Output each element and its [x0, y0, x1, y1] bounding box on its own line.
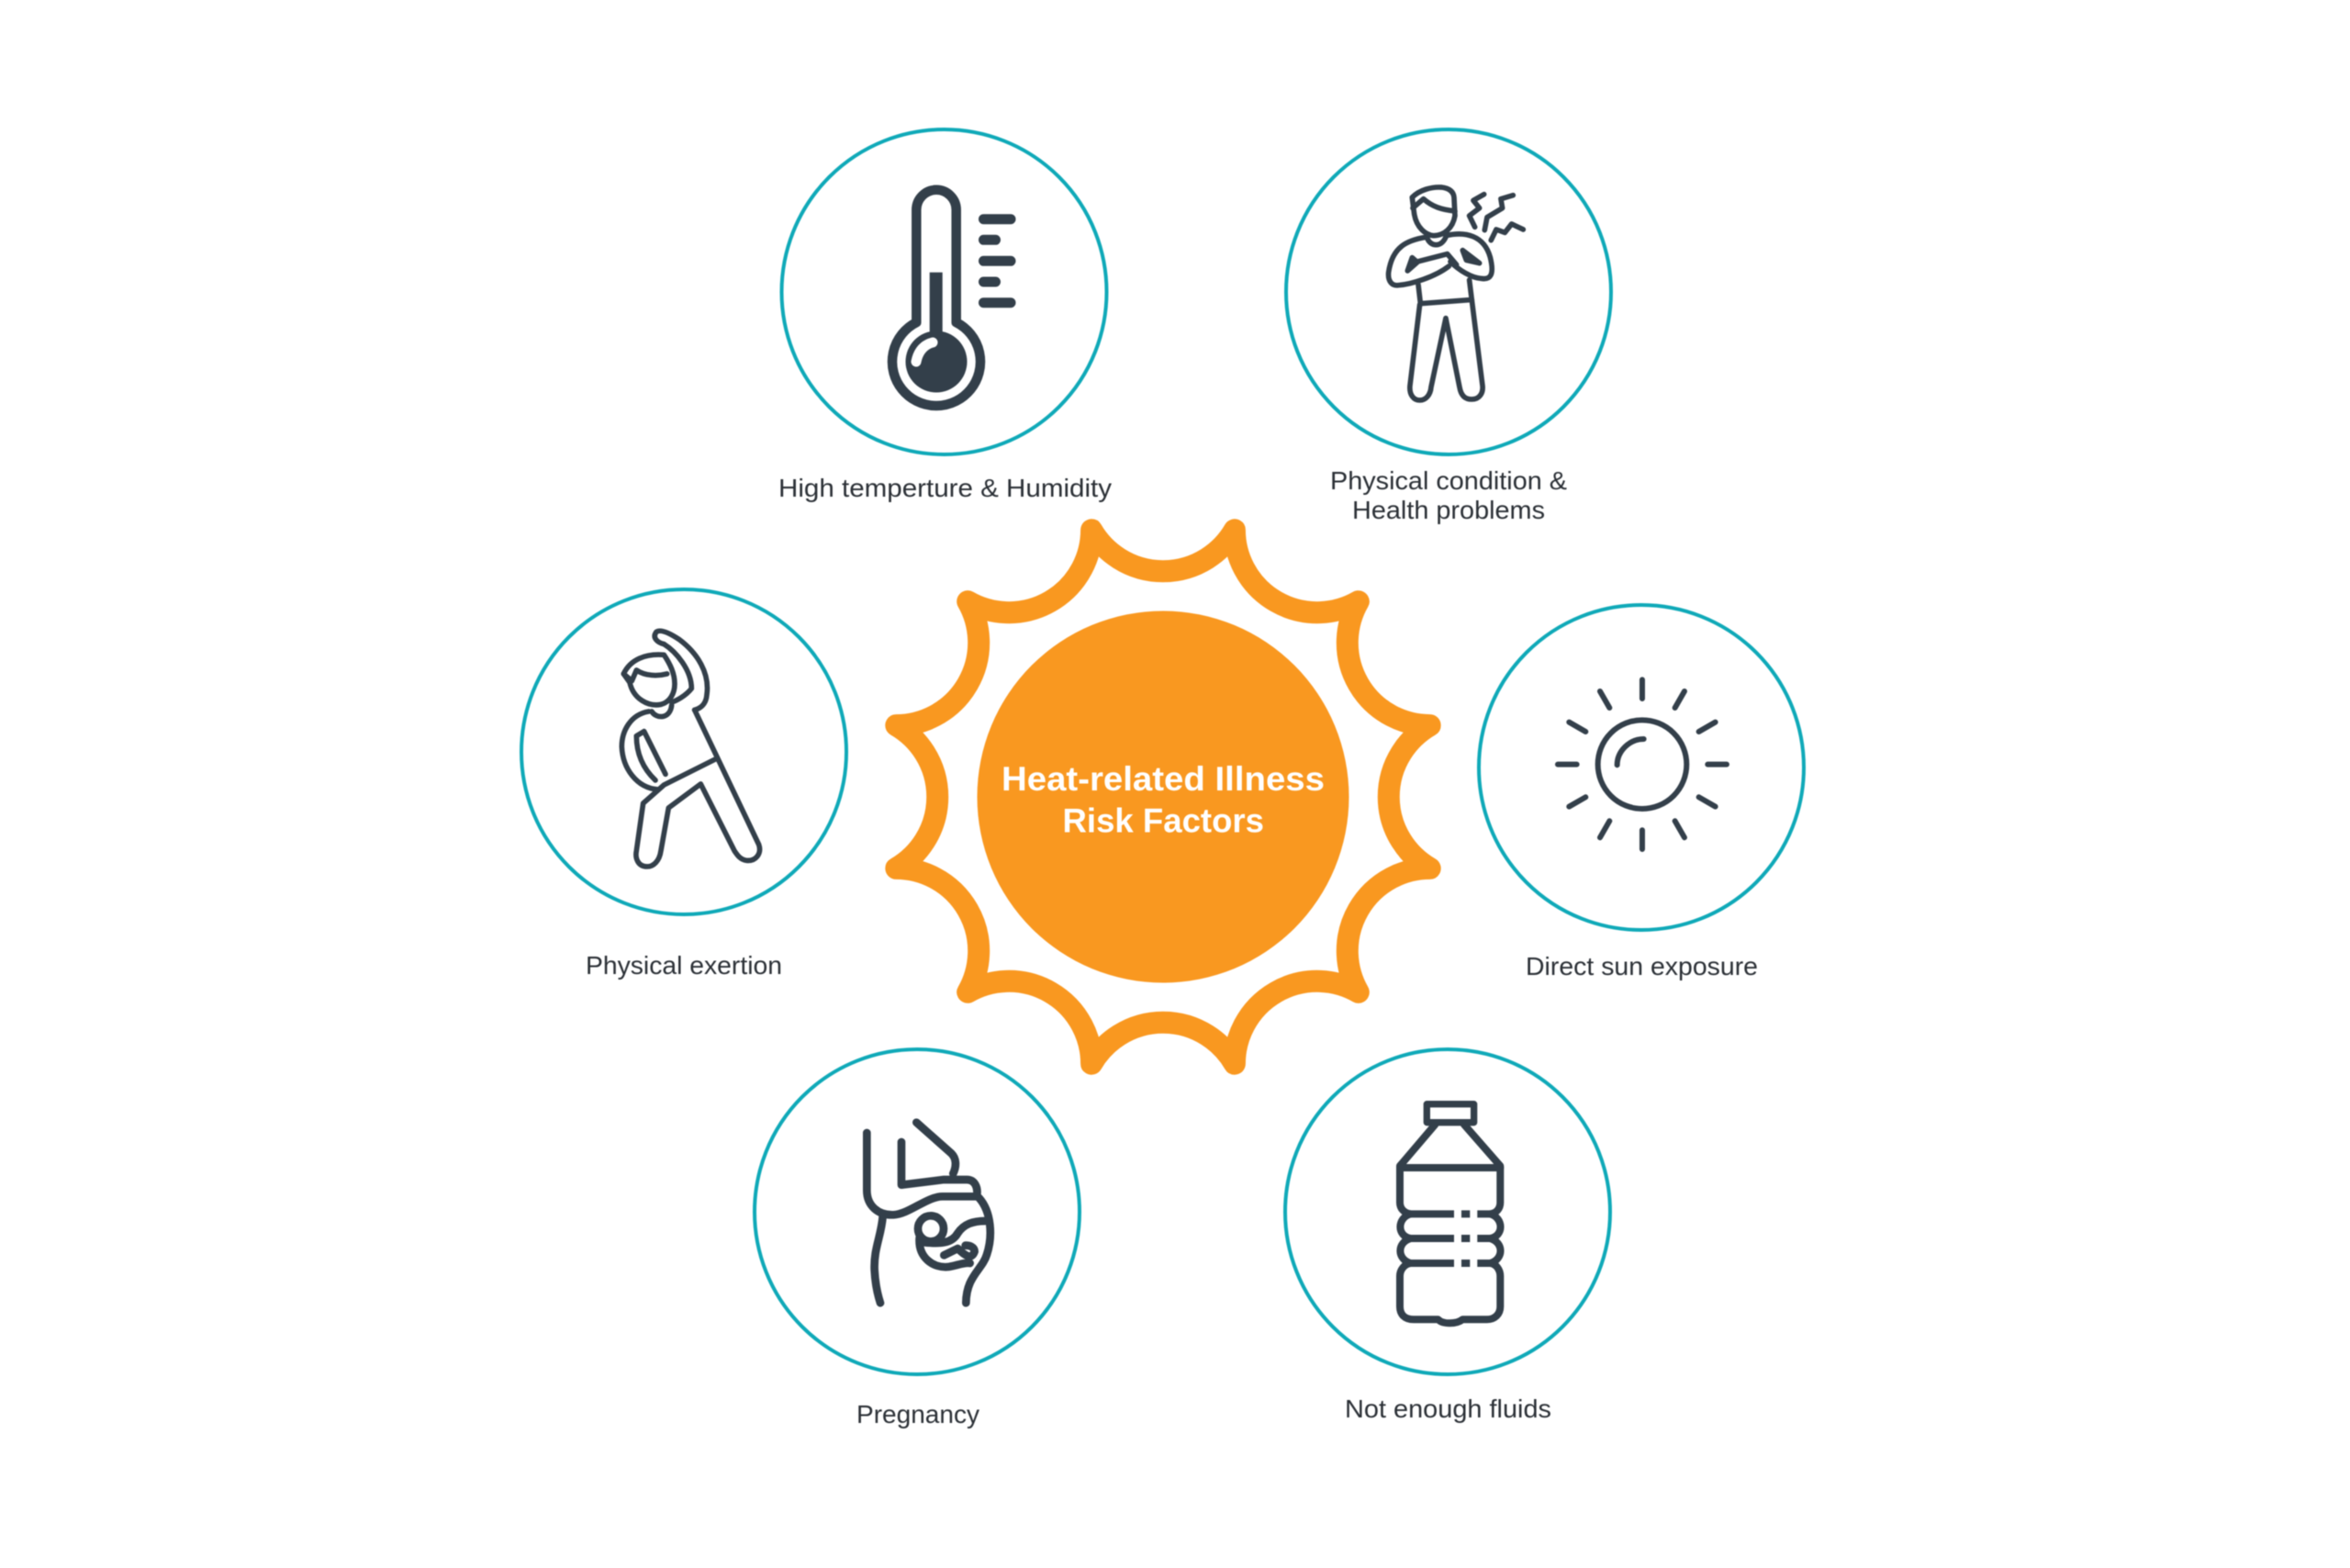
label: Physical exertion	[586, 951, 782, 980]
central sun: Heat-related Illness Risk Factors	[896, 530, 1430, 1064]
circle ring	[521, 589, 846, 914]
panel: high temperature and humidity	[778, 129, 1112, 502]
title: Risk Factors	[1063, 802, 1264, 839]
circle ring	[1285, 1049, 1610, 1374]
icon: man with shoulder pain	[1389, 187, 1523, 400]
label: Physical condition &	[1330, 466, 1567, 495]
panel: pregnancy	[755, 1049, 1080, 1428]
panel: physical condition and health problems	[1286, 129, 1611, 524]
icon: water bottle	[1400, 1104, 1501, 1323]
circle ring	[755, 1049, 1080, 1374]
panel: direct sun exposure	[1479, 605, 1804, 980]
circle ring	[1479, 605, 1804, 930]
sun outline with twelve points	[896, 530, 1430, 1064]
sun disc	[977, 611, 1349, 982]
circle ring	[782, 129, 1107, 454]
label: Not enough fluids	[1345, 1394, 1551, 1423]
label: High temperture & Humidity	[778, 474, 1112, 502]
label: Direct sun exposure	[1526, 952, 1758, 980]
icon: thermometer	[892, 190, 1011, 406]
icon: person stretching	[621, 631, 760, 867]
label: Pregnancy	[856, 1400, 979, 1428]
icon: sun	[1558, 679, 1727, 849]
icon: pregnant body with fetus	[867, 1123, 990, 1303]
circle ring	[1286, 129, 1611, 454]
title: Heat-related Illness	[1002, 760, 1325, 798]
panel: physical exertion	[521, 589, 846, 980]
label: Health problems	[1352, 496, 1545, 524]
panel: not enough fluids	[1285, 1049, 1610, 1423]
